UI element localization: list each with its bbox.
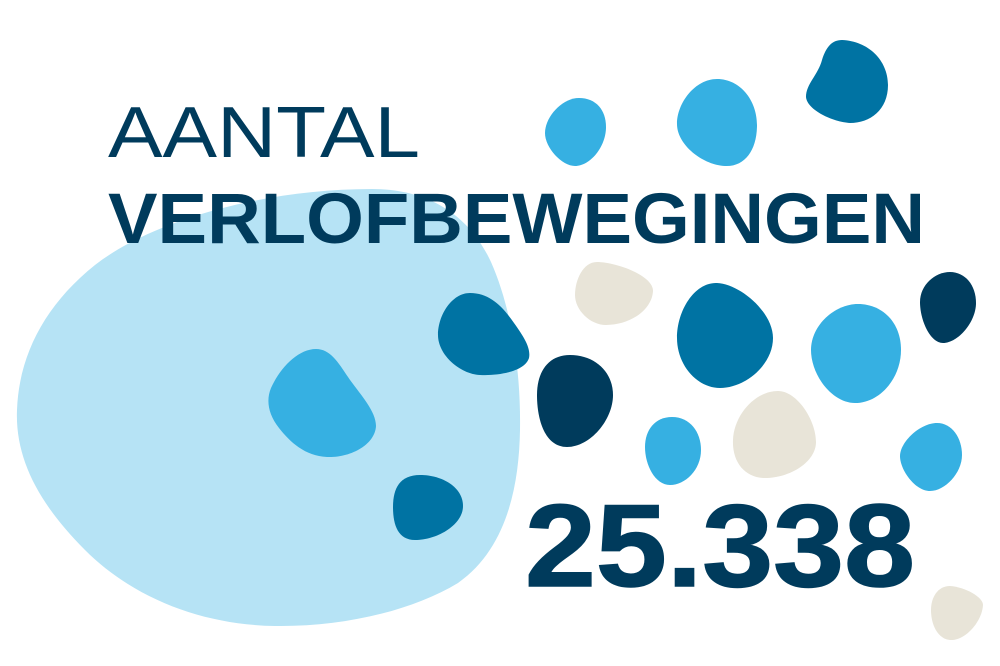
blob: dark blue at edge	[438, 293, 529, 375]
blob: top dark blue	[806, 40, 888, 123]
blob: top medium blue	[677, 79, 757, 166]
title line: Verlofbewegingen: VERLOFBEWEGINGEN	[108, 180, 925, 259]
blob: mid blue inside large shape	[268, 349, 376, 457]
blob: dark blue lower	[393, 475, 463, 540]
blob: navy right	[920, 272, 976, 343]
total number: 25.338	[525, 480, 915, 611]
blob: blue small centre	[645, 417, 701, 485]
title	[108, 93, 925, 259]
blob: blue right large	[811, 304, 901, 403]
large light blue blob	[17, 189, 520, 626]
blob: beige bottom right	[931, 586, 983, 640]
blob: beige upper	[575, 262, 653, 325]
blob: top small blue	[545, 98, 606, 166]
blob: beige centre	[733, 391, 816, 478]
title line: Aantal: AANTAL	[108, 93, 420, 173]
blob: blue right small	[900, 423, 962, 491]
blob: navy centre	[537, 355, 613, 447]
blob: dark blue centre large	[677, 283, 773, 388]
